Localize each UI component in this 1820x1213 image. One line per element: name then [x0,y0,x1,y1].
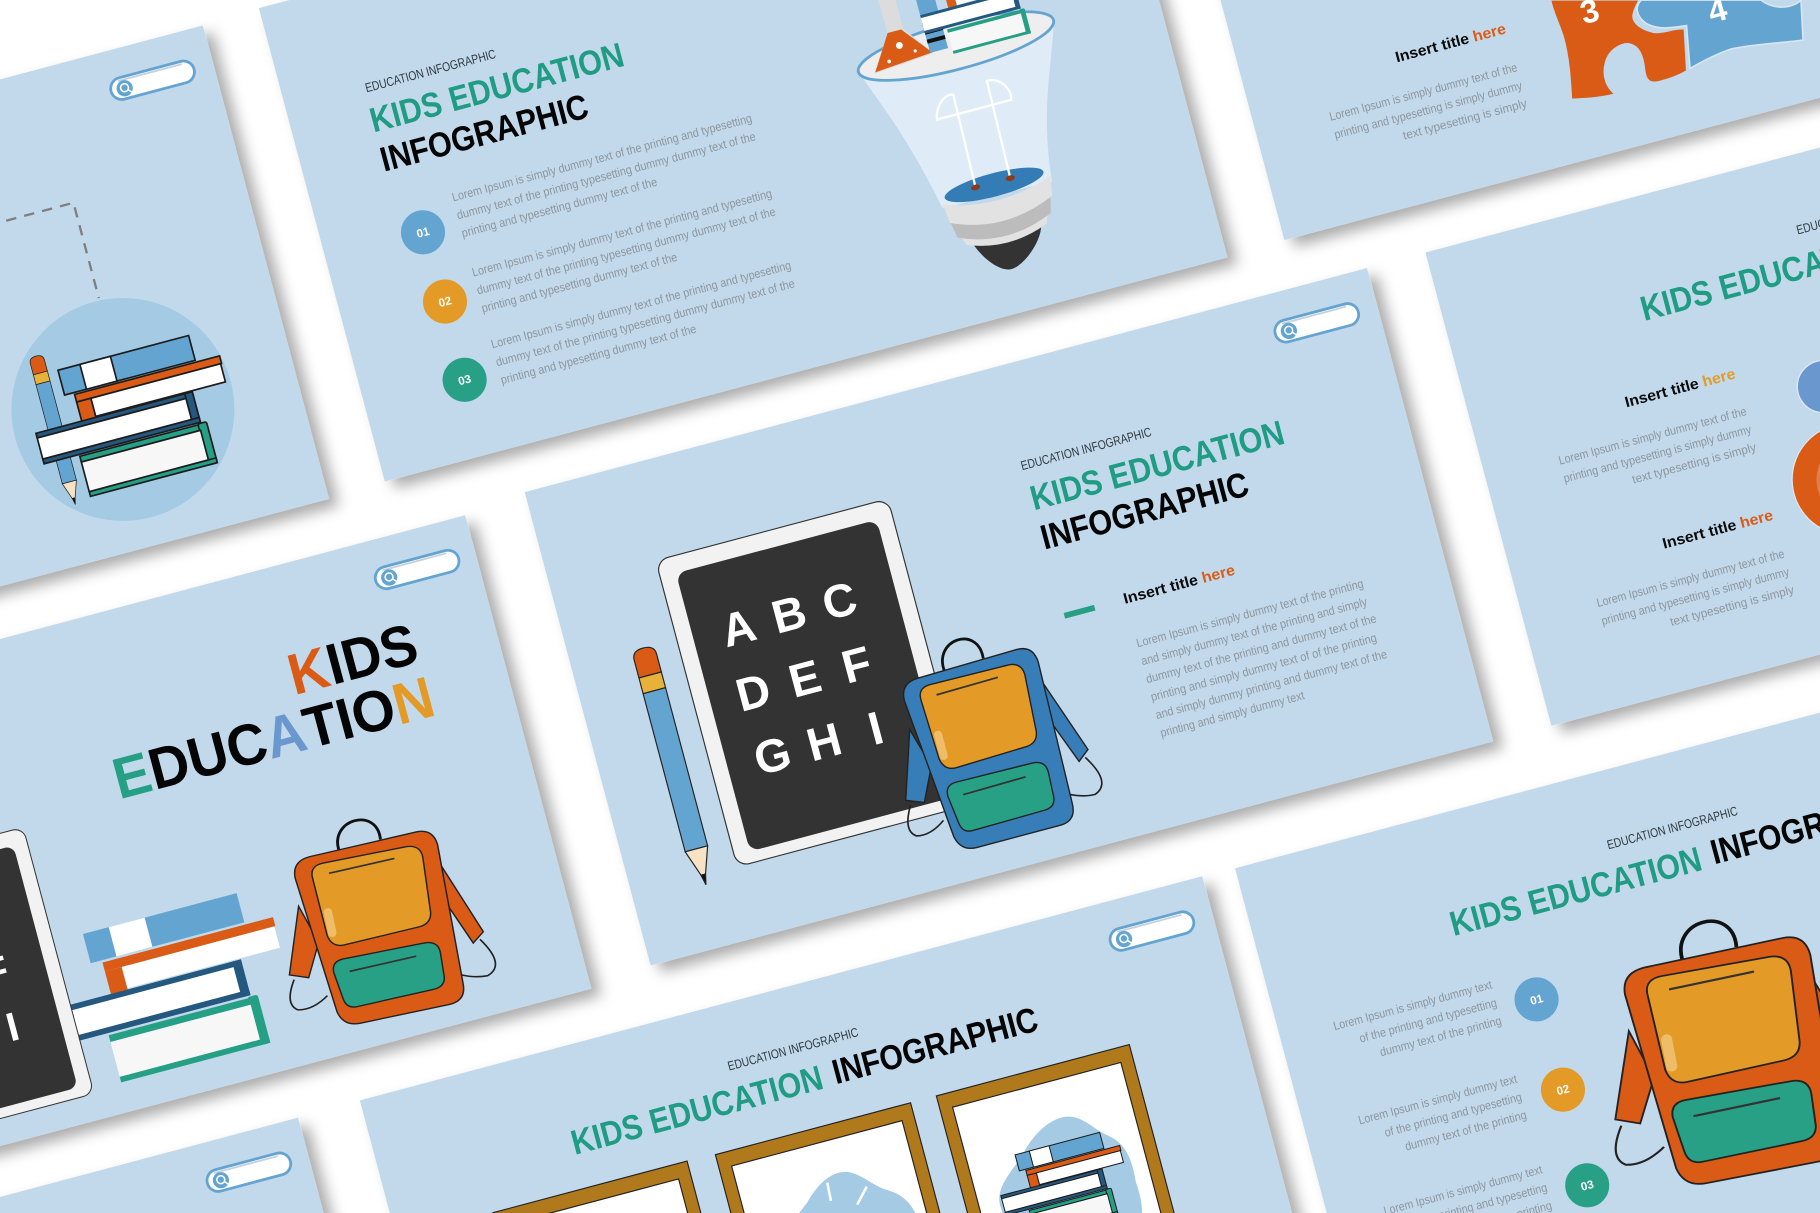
icon: tablet with letters [656,499,969,867]
title: EDUCATION: EDUCATION [106,664,441,812]
block two: Insert title here [1661,507,1775,553]
icon: orange backpack [257,798,502,1036]
item 02: of the printing and typesetting [1383,1090,1523,1140]
item 02: Lorem Ipsum is simply dummy text of the printing and typesetting [470,186,773,280]
title black: INFOGRAPHIC [828,1000,1042,1092]
small heading: EDUCATION INFOGRAPHIC [1605,803,1739,852]
block two: Lorem Ipsum is simply dummy text of the [1595,547,1786,610]
icon: tablet with letters: A [716,598,761,657]
illustration: light bulb [836,0,1113,294]
icon: tablet with letters: E [783,649,826,708]
insert title: Insert title here [1393,21,1508,66]
slide: frames (bottom middle) [360,876,1328,1213]
block one: Insert title here [1623,366,1737,411]
small heading: EDUCATION INFOGRAPHIC [726,1024,860,1074]
block one: printing and typesetting is simply dummy [1562,422,1754,486]
icon: book stack [22,329,246,506]
slide: insert title list (right) [1425,28,1820,726]
icon: tablet with letters: B [766,585,812,644]
item 01 [1332,962,1564,1073]
block two: text typesetting is simply [1669,582,1796,629]
item 02 [417,186,783,330]
title line two: INFOGRAPHIC [1036,465,1253,557]
body text: text typesetting is simply [1401,96,1529,143]
item 01: printing and typesetting dummy text of the [460,175,659,240]
circle backdrop [0,273,259,546]
item 01: of the printing and typesetting [1358,996,1498,1045]
block one: text typesetting is simply [1631,440,1758,486]
item 02: 02 [437,294,453,310]
slide: bottom left corner [0,1118,424,1213]
icon: pencil [29,354,82,506]
slide: numbered list with light bulb (top middle) [259,0,1227,482]
item 01: dummy text of the printing typesetting dummy dummy text of the [455,129,757,222]
item 03 [1382,1147,1614,1213]
insert title: Insert title here [1122,562,1237,608]
item 01: 01 [415,225,432,241]
slide: main abc tablet (center) [525,268,1493,966]
title: KIDS EDUCATION [1446,840,1706,944]
item 02: Lorem Ipsum is simply dummy text [1357,1072,1519,1127]
frame two [715,1103,991,1213]
frame one [493,1161,768,1213]
title: KIDS: KIDS [281,611,425,708]
icon: blue backpack [865,613,1110,863]
icon: tablet with letters: C [817,571,862,630]
title line one: KIDS EDUCATION [1026,413,1288,518]
search pill [1108,909,1196,953]
search pill [1272,301,1361,345]
item 01 [393,111,764,259]
body text: printing and simply dummy text of of the printing [1149,631,1378,704]
icon: book stack [16,886,304,1100]
block two [1584,506,1796,646]
title line one: KIDS EDUCATION [366,35,628,140]
slide: books with dashed connector (left) [0,25,329,723]
icon: tablet with letters: H [801,712,847,771]
title: KIDS EDUCATION [567,1058,827,1163]
dashed connector [0,203,99,359]
item 03 [435,258,803,407]
icon: tablet [0,827,94,1147]
block two: printing and typesetting is simply dummy [1600,564,1791,628]
icon: large orange backpack [1576,896,1820,1199]
slide: kids education cover (left middle) [0,515,591,1213]
item 02: dummy text of the printing typesetting dummy dummy text of the [475,204,777,297]
frame three [936,1045,1210,1213]
item 01: Lorem Ipsum is simply dummy text [1332,977,1494,1033]
body text [1328,60,1529,160]
body text: printing and typesetting is simply dummy [1333,78,1524,142]
item 01: Lorem Ipsum is simply dummy text of the printing and typesetting [450,111,753,204]
body text [1135,575,1394,740]
item 03: Lorem Ipsum is simply dummy text of the printing and typesetting [489,258,793,351]
body text: Lorem Ipsum is simply dummy text of the printing [1135,576,1365,650]
icon: tablet with letters: G [748,726,797,785]
search pill [205,1150,293,1194]
block one: Lorem Ipsum is simply dummy text of the [1557,404,1748,468]
item 01: dummy text of the printing [1378,1013,1503,1059]
icon: balls [1792,360,1820,535]
icon: tablet with letters: I [863,701,889,755]
item 03: 03 [457,372,473,388]
icon: tablet with letters: F [836,636,877,694]
icon: tablet: I [1,1003,24,1050]
item 02: 02 [1555,1082,1571,1098]
item 03: 03 [1579,1178,1596,1194]
item 02: printing and typesetting dummy text of the [480,250,679,315]
item 02: dummy text of the printing [1403,1108,1528,1153]
search pill [373,548,461,591]
item 03: printing and typesetting dummy text of the [499,322,698,387]
body text: and simply dummy printing and dummy text of the [1154,647,1389,722]
icon: puzzle pieces [1551,0,1803,99]
body text: and simply dummy text of the printing and simply [1140,594,1369,668]
title line two: INFOGRAPHIC [376,87,593,180]
slide: puzzle (top right) [1158,0,1820,240]
item 02 [1357,1055,1590,1164]
small heading: EDUCATION INFOGRAPHIC [363,46,497,95]
body text: dummy text of the printing and dummy text of the [1144,611,1378,686]
search pill [108,59,197,102]
body text: printing and simply dummy text [1159,688,1306,740]
green dash [1064,605,1095,619]
slide: backpack list (bottom right) [1235,644,1820,1213]
icon: tablet with letters: D [730,663,776,722]
item 03: dummy text of the printing typesetting dummy dummy text of the [494,276,796,369]
icon: pencil [632,645,717,888]
block one [1547,365,1758,503]
small heading: EDUCATION INFOGRAPHIC [1019,424,1153,473]
body text: Lorem Ipsum is simply dummy text of the [1328,60,1519,124]
item 01: 01 [1529,992,1545,1008]
